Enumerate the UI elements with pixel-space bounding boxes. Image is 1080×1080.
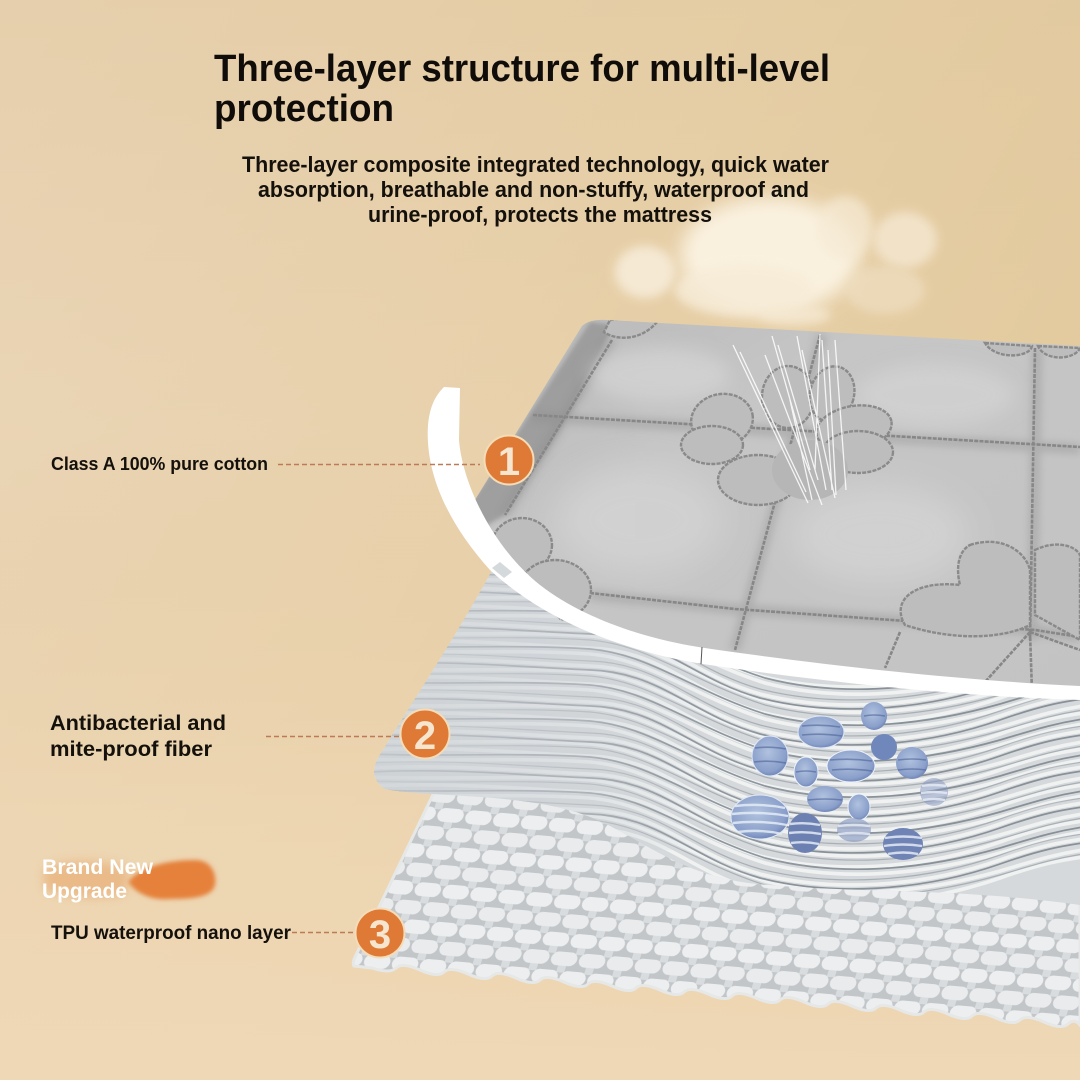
- label: layer 2: Antibacterial and: [50, 712, 226, 735]
- subtitle: absorption, breathable and non-stuffy, waterproof and: [258, 177, 809, 202]
- water droplets: [731, 702, 948, 860]
- seams: [505, 335, 1080, 692]
- brand new upgrade badge: [42, 856, 215, 903]
- leader line 1: [278, 464, 480, 466]
- badge 2: [266, 710, 450, 758]
- fiber lines: [374, 572, 1080, 893]
- label: layer 2: [50, 712, 226, 761]
- label: layer 2: mite-proof fiber: [50, 738, 212, 761]
- orange brush blob: [44, 860, 215, 899]
- brand new upgrade badge: Brand New: [42, 856, 154, 879]
- subtitle: [242, 152, 829, 227]
- leader line 3: [292, 932, 354, 934]
- title: protection: [214, 88, 394, 130]
- brand new upgrade badge: Upgrade: [42, 880, 127, 903]
- layer 3: knit waterproof layer: [353, 780, 1080, 1027]
- label: layer 3: TPU waterproof nano layer: [51, 923, 292, 944]
- flower motifs: [492, 319, 1080, 640]
- badge 3: 3: [369, 913, 391, 957]
- white fibres over flower: [733, 334, 846, 505]
- white curved edge band: [428, 387, 1080, 700]
- subtitle: Three-layer composite integrated technology, quick water: [242, 152, 829, 177]
- subtitle: urine-proof, protects the mattress: [368, 202, 712, 227]
- badge 1: [278, 436, 534, 484]
- badge 1: 1: [498, 440, 520, 484]
- quilt shading: [470, 319, 1080, 692]
- layer 2: fiber layer: [360, 550, 1080, 905]
- badge 3: [292, 908, 404, 958]
- badge 2: 2: [414, 714, 436, 758]
- label: layer 1: Class A 100% pure cotton: [51, 454, 268, 474]
- title: [214, 48, 830, 130]
- leader line 2: [266, 736, 401, 738]
- layer 1: quilted cotton top: [470, 319, 1080, 700]
- steam cloud: [615, 196, 937, 325]
- title: Three-layer structure for multi-level: [214, 48, 830, 90]
